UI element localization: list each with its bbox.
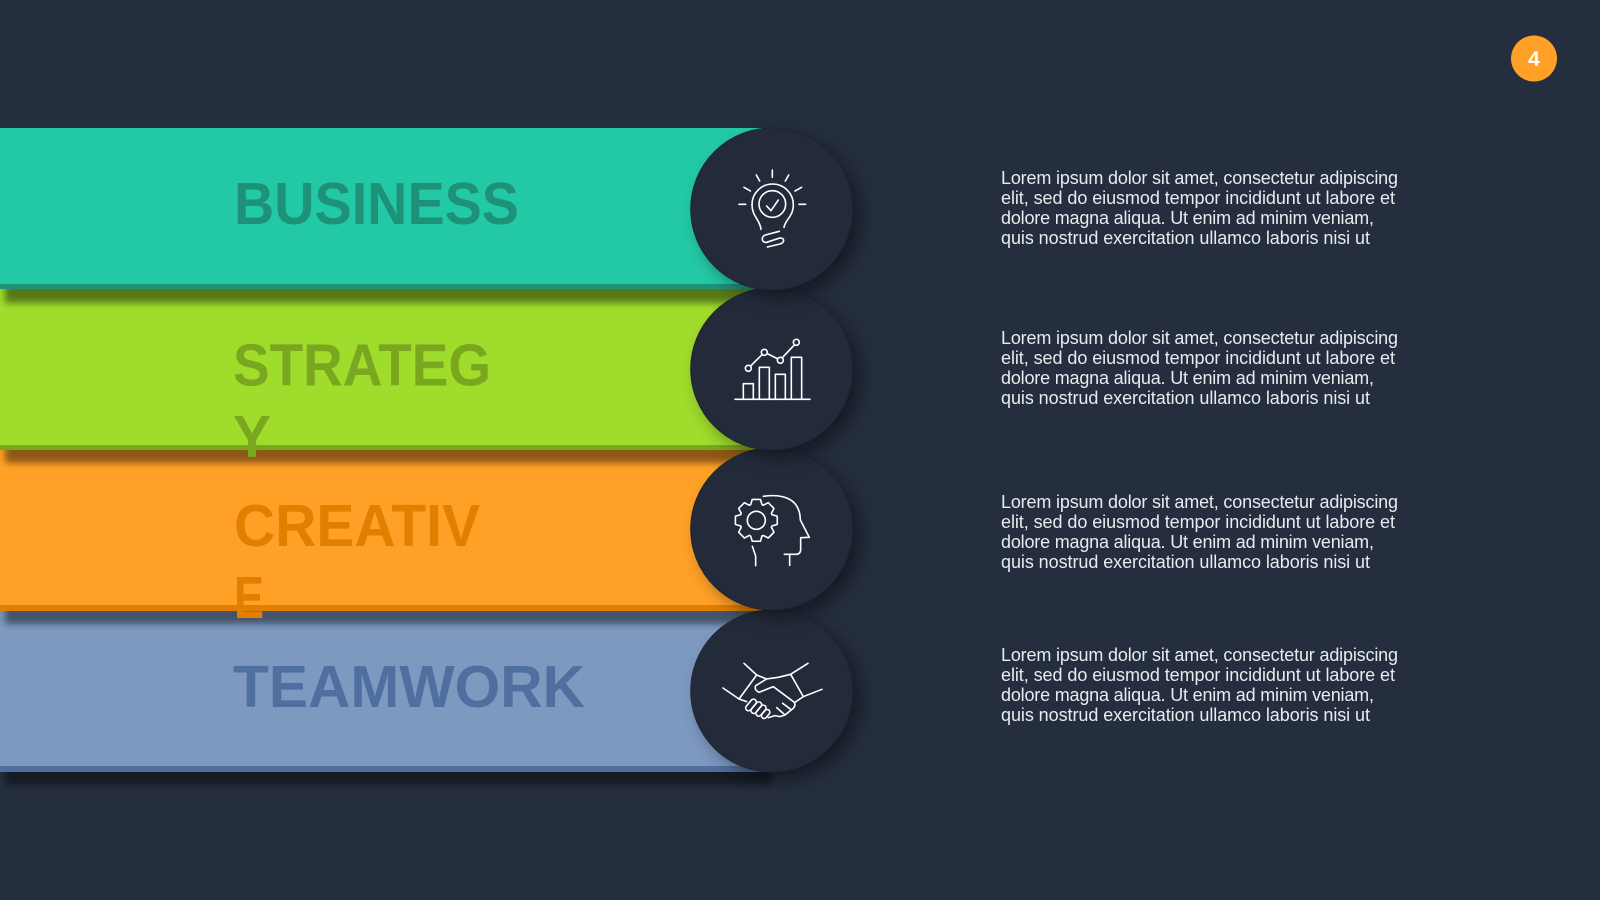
- text block: creative: dolore magna aliqua. Ut enim ad minim veniam,: [1001, 532, 1374, 552]
- text block: business: Lorem ipsum dolor sit amet, consectetur adipiscing: [1001, 168, 1398, 188]
- heading: business: BUSINESS: [234, 171, 519, 237]
- text block: teamwork: dolore magna aliqua. Ut enim ad minim veniam,: [1001, 685, 1374, 705]
- circle: business: [691, 128, 860, 297]
- text block: strategy: quis nostrud exercitation ullamco laboris nisi ut: [1001, 388, 1370, 408]
- band: strategy: [0, 289, 771, 463]
- heading: teamwork: TEAMWORK: [233, 654, 585, 720]
- icon: handshake: [723, 663, 822, 720]
- icon: bar chart with trend: [735, 339, 810, 399]
- heading: creative: [234, 493, 480, 631]
- page number badge: [1511, 36, 1557, 82]
- heading: creative: CREATIV: [234, 493, 480, 559]
- text block: business: elit, sed do eiusmod tempor incididunt ut labore et: [1001, 188, 1395, 208]
- text block: business: dolore magna aliqua. Ut enim ad minim veniam,: [1001, 208, 1374, 228]
- text block: strategy: dolore magna aliqua. Ut enim ad minim veniam,: [1001, 368, 1374, 388]
- text block: teamwork: [1001, 645, 1398, 725]
- text block: creative: quis nostrud exercitation ullamco laboris nisi ut: [1001, 552, 1370, 572]
- band: teamwork: [0, 611, 771, 785]
- text block: strategy: elit, sed do eiusmod tempor incididunt ut labore et: [1001, 348, 1395, 368]
- circle: teamwork: [691, 610, 860, 779]
- text block: teamwork: elit, sed do eiusmod tempor incididunt ut labore et: [1001, 665, 1395, 685]
- icon: head with gear: [735, 496, 809, 566]
- text block: business: quis nostrud exercitation ullamco laboris nisi ut: [1001, 228, 1370, 248]
- text block: creative: Lorem ipsum dolor sit amet, consectetur adipiscing: [1001, 492, 1398, 512]
- heading: strategy: Y: [233, 404, 271, 470]
- text block: teamwork: quis nostrud exercitation ullamco laboris nisi ut: [1001, 705, 1370, 725]
- icon: light bulb: [739, 170, 806, 247]
- heading: strategy: [233, 332, 491, 470]
- text block: teamwork: Lorem ipsum dolor sit amet, consectetur adipiscing: [1001, 645, 1398, 665]
- page number badge: 4: [1528, 48, 1540, 71]
- circle: strategy: [691, 288, 860, 457]
- text block: strategy: [1001, 328, 1398, 408]
- band: business: [0, 128, 771, 303]
- text block: creative: elit, sed do eiusmod tempor incididunt ut labore et: [1001, 512, 1395, 532]
- text block: business: [1001, 168, 1398, 248]
- text block: strategy: Lorem ipsum dolor sit amet, consectetur adipiscing: [1001, 328, 1398, 348]
- circle: creative: [691, 448, 860, 617]
- heading: creative: E: [234, 565, 264, 631]
- band: creative: [0, 450, 771, 624]
- heading: strategy: STRATEG: [233, 332, 491, 398]
- text block: creative: [1001, 492, 1398, 572]
